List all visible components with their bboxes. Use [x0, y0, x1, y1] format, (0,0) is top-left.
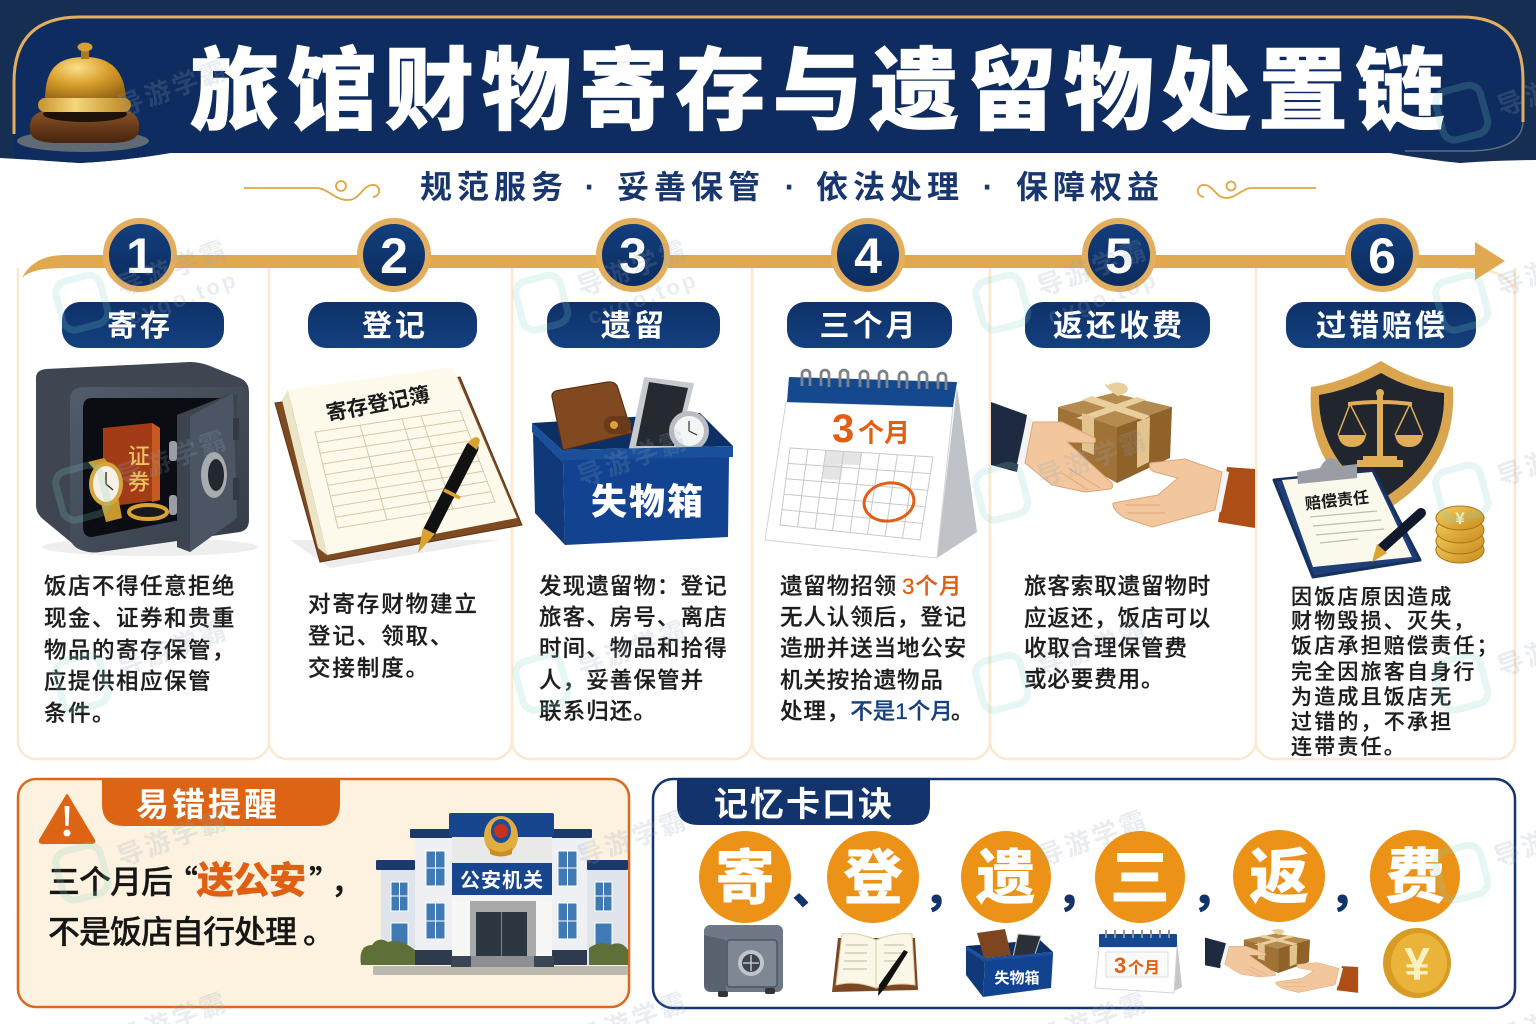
icon: service bell [17, 42, 149, 152]
icon: coin stack: ¥ [1455, 509, 1465, 528]
step name pills: 三个月 [820, 310, 918, 343]
icon: shield with scales [1311, 361, 1453, 513]
watermark layer: cvgo.top [584, 266, 702, 329]
step 6 text: 财物毁损、灭失， [1291, 610, 1477, 633]
separators: 、 [792, 865, 836, 914]
title: 旅馆财物寄存与遗留物处置链 [190, 42, 1445, 142]
step name pills: 返还收费 [1053, 310, 1185, 343]
step number badges: 2 [380, 228, 408, 284]
subtitle: 依法处理 [816, 169, 964, 205]
separators: ， [1329, 866, 1373, 915]
reminder text: 三个月后 [48, 864, 172, 900]
icon: small hands with parcel [1205, 929, 1358, 993]
step 3 text [539, 574, 728, 724]
icon: small calendar [1095, 930, 1182, 993]
step 1 text: 条件。 [44, 701, 116, 726]
icon: police building [360, 813, 628, 975]
step 4 text: 无人认领后，登记 [780, 605, 967, 630]
step name pills: 寄存 [107, 310, 173, 343]
watermark layer: 导游学霸 [113, 424, 233, 492]
subtitle: · [983, 169, 993, 205]
step 3 text: 发现遗留物：登记 [539, 574, 728, 599]
mnemonic characters: 寄 [715, 845, 775, 912]
icon: hands passing parcel [991, 382, 1255, 528]
step number badges [106, 221, 1416, 289]
step 6 text: 饭店承担赔偿责任； [1291, 635, 1500, 658]
separators [792, 865, 1373, 915]
icon: desk calendar [765, 370, 977, 558]
icon: yuan coin: ¥ [1404, 938, 1430, 990]
panel: six step cards [18, 230, 1515, 759]
mnemonic characters: 登 [843, 845, 903, 912]
step number badges: 5 [1105, 228, 1133, 284]
icon: liability clipboard: 赔偿责任 [1304, 488, 1370, 513]
watermark layer: 导游学霸 [1033, 614, 1153, 682]
watermark layer: 导游学霸 [573, 614, 693, 682]
tab: mnemonic heading: 记忆卡口诀 [714, 786, 894, 824]
icon: warning triangle [40, 795, 94, 843]
reminder text: ” [309, 857, 340, 903]
icon: small lost and found box: 失物箱 [994, 969, 1040, 987]
step 1 text: 物品的寄存保管， [44, 638, 236, 663]
icon: open safe [36, 362, 258, 556]
step 4 text: 机关按拾遗物品 [780, 668, 944, 693]
separators: ， [923, 866, 967, 915]
step 4 text: 。 [951, 699, 974, 724]
step 1 text: 应提供相应保管 [44, 669, 212, 694]
ornament: left flourish [244, 181, 379, 200]
ornament: right flourish [1198, 182, 1316, 198]
icon: register book [275, 367, 522, 568]
separators: ， [1056, 866, 1100, 915]
separators: ， [1191, 866, 1235, 915]
arrow: timeline [22, 242, 1505, 280]
icon: open safe: 券 [128, 470, 150, 495]
reminder text: 送公安 [196, 860, 305, 901]
watermark layer: 导游学霸 [573, 424, 693, 492]
icon: small safe [704, 925, 783, 997]
icon: police badge [484, 816, 518, 856]
subtitle: 妥善保管 [617, 169, 765, 205]
mnemonic characters: 费 [1385, 844, 1445, 911]
step 5 text: 收取合理保管费 [1024, 636, 1188, 661]
watermark layer: 导游学霸 [1033, 804, 1153, 872]
step 6 text: 为造成且饭店无 [1291, 686, 1453, 709]
mnemonic characters [699, 830, 1460, 923]
step 5 text: 旅客索取遗留物时 [1024, 574, 1211, 599]
icon: desk calendar: 个月 [858, 418, 910, 448]
step 5 text: 或必要费用。 [1024, 667, 1164, 692]
icon: register book: 寄存登记簿 [324, 383, 432, 426]
watermark layer: 导游学霸 [113, 804, 233, 872]
header banner [0, 0, 1536, 163]
step 2 text: 对寄存财物建立 [308, 592, 479, 617]
subtitle: · [785, 169, 795, 205]
step 5 text: 应返还，饭店可以 [1024, 606, 1211, 631]
watermark layer: cvgo.top [124, 266, 242, 329]
icon: coin stack [1436, 506, 1484, 563]
icon: desk calendar: 3 [832, 407, 854, 451]
step 3 text: 旅客、房号、离店 [539, 605, 728, 630]
step 6 text: 连带责任。 [1291, 736, 1407, 759]
step number badges: 6 [1368, 228, 1396, 284]
icon: small calendar: 3 [1114, 953, 1126, 978]
icon: lost and found box: 失物箱 [591, 481, 705, 522]
subtitle: · [585, 169, 595, 205]
step 1 text: 饭店不得任意拒绝 [44, 574, 236, 599]
reminder text: ， [331, 857, 362, 903]
step 2 text [308, 592, 479, 681]
step 5 text [1024, 574, 1211, 692]
subtitle: 保障权益 [1016, 169, 1164, 205]
watermark layer: 导游学霸 [573, 804, 693, 872]
mnemonic characters: 遗 [975, 845, 1036, 912]
watermark layer: 导游学霸 [1033, 424, 1153, 492]
step number badges: 3 [619, 228, 647, 284]
step 4 text: 处理，不是1个月 [780, 699, 953, 724]
reminder text [48, 857, 362, 950]
watermark layer: 导游学霸 [113, 614, 233, 682]
mnemonic characters: 三 [1110, 845, 1170, 912]
step 6 text: 过错的，不承担 [1291, 711, 1453, 734]
tab: reminder heading [102, 778, 340, 826]
step 6 text: 因饭店原因造成 [1291, 586, 1453, 609]
reminder text: 不是饭店自行处理 [48, 914, 296, 950]
tab: mnemonic heading [677, 778, 930, 825]
subtitle: 规范服务 [420, 169, 568, 205]
reminder text: 。 [303, 914, 334, 950]
icon: police building: 公安机关 [460, 869, 544, 892]
step name pills [62, 302, 1476, 348]
panel: memory card mnemonic [653, 778, 1515, 1008]
watermark layer: 导游学霸 [1033, 234, 1153, 302]
step number badges: 4 [854, 228, 882, 284]
step 3 text: 联系归还。 [539, 699, 657, 724]
step number badges: 1 [126, 228, 154, 284]
step 1 text: 现金、证券和贵重 [44, 606, 236, 631]
watermark layer: cvgo.top [1044, 266, 1162, 329]
step name pills: 遗留 [601, 310, 667, 343]
reminder text: “ [166, 857, 197, 903]
icon: small open book [832, 934, 918, 996]
step 4 text: 造册并送当地公安 [780, 636, 967, 661]
tab: reminder heading: 易错提醒 [136, 786, 280, 823]
icon: yuan coin [1383, 928, 1451, 998]
step 6 text: 完全因旅客自身行 [1291, 661, 1477, 684]
step 2 text: 登记、领取、 [308, 624, 454, 649]
icon: liability clipboard [1274, 458, 1421, 577]
watermark layer: 导游学霸 [573, 234, 693, 302]
icon: open safe: 证 [128, 444, 150, 469]
panel: common mistake reminder [18, 778, 629, 1007]
icon: lost and found box [532, 378, 733, 545]
step 4 text: 遗留物招领 [780, 574, 897, 599]
step 1 text [44, 574, 236, 726]
step 3 text: 人，妥善保管并 [539, 668, 704, 693]
step 4 text: 3个月 [902, 574, 962, 599]
icon: small lost and found box [966, 929, 1053, 997]
subtitle [420, 169, 1164, 205]
mnemonic characters: 返 [1249, 844, 1309, 911]
step name pills: 登记 [362, 310, 428, 343]
watermark layer: 导游学霸 [113, 54, 233, 122]
step 2 text: 交接制度。 [308, 656, 430, 681]
icon: small calendar: 个月 [1128, 959, 1160, 977]
step 6 text [1291, 586, 1500, 759]
step 4 text [780, 574, 974, 724]
step 3 text: 时间、物品和拾得 [539, 636, 728, 661]
step name pills: 过错赔偿 [1316, 310, 1448, 343]
watermark layer: 导游学霸 [113, 234, 233, 302]
